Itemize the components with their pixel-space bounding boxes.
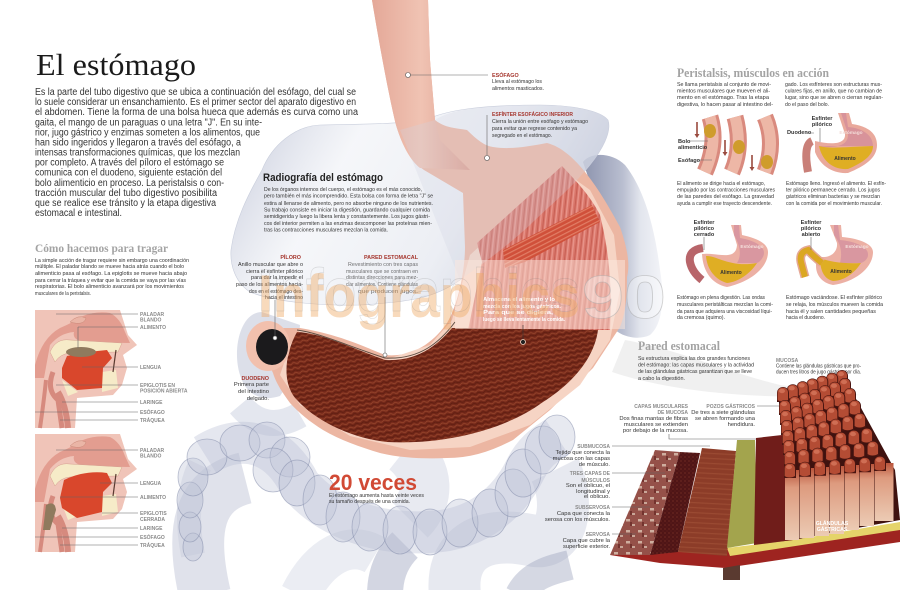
diagram: stomach open sphincter: Alimento (830, 269, 852, 275)
gland label: GLÁNDULAS (816, 520, 849, 527)
colon left tube (189, 465, 200, 555)
label: capas musculares de mucosa: CAPAS MUSCULARES (634, 404, 689, 410)
leader lines and labels: PALADAR (140, 448, 164, 454)
callout: esofago: alimentos masticados. (492, 86, 544, 92)
text: radiografia del estomago: semidigerida y luego la libera lenta y constantemente. Los jugos gástri- (264, 214, 430, 220)
callout: esofago: Lleva al estómago los (492, 79, 542, 85)
labels left of block: el oblicuo. (584, 494, 610, 500)
label: mucosa: Contiene las glándulas gástricas que pro- (776, 364, 861, 370)
intro text columns: do el paso del bolo. (785, 102, 829, 108)
captions row 2 (677, 295, 884, 321)
swallowing text block: musculares de la peristalsis. (35, 291, 91, 297)
callout: esfinter esofagico inferior: Cierra la unión entre esófago y estómago (492, 119, 588, 125)
illustration: liver overlay on stomach (400, 105, 609, 280)
captions row 1: Estómago lleno. Ingresó el alimento. El esfín- (786, 181, 886, 187)
muscle layers (468, 166, 611, 330)
intro text columns: culares fijas, en anillo, que no cambian de (785, 88, 882, 94)
watermark: Infographics (258, 257, 580, 324)
label: pozos gastricos: hendidura. (728, 422, 755, 428)
captions row 1 (677, 181, 886, 207)
intro text block: que se realice ese tránsito y la etapa digestiva (35, 198, 216, 209)
diagram: stomach closed sphincter: pilórico (694, 226, 715, 232)
diagram: stomach closed sphincter: Alimento (720, 270, 742, 276)
diagram: swallowing step 1 (35, 310, 188, 428)
serosa layer (610, 450, 680, 555)
callout: text in stomach band (483, 297, 566, 344)
diagram: stomach closed sphincter: Estómago (740, 244, 764, 250)
brown muscle layer (678, 448, 736, 556)
label: capas musculares de mucosa (619, 404, 820, 439)
watermark: Infographics (258, 263, 580, 330)
labels left of block: longitudinal y (576, 489, 610, 495)
callout: piloro: PÍLORO (280, 253, 301, 261)
callout: text in stomach band: luego se lleva lentamente la comida. (483, 317, 566, 323)
intro text columns: mento en el estómago. Tras la etapa (677, 95, 770, 101)
diagram: esophagus tubes (678, 117, 773, 172)
diagram: esophagus tubes: Esófago (678, 158, 701, 164)
captions row 2: hacia el duodeno. (786, 315, 825, 321)
callout: 20 veces (329, 470, 424, 505)
body text: a cabo la digestión. (638, 376, 685, 382)
body text: Su estructura explica las dos grandes funciones (638, 356, 750, 362)
body text: de las glándulas gástricas garantizan que se lleve (638, 369, 752, 375)
grey background swoosh (612, 340, 860, 397)
intro text block: el abdomen. Tiene la forma de una bolsa hueca que además es curva como una (35, 107, 358, 118)
label: capas musculares de mucosa: DE MUCOSA (657, 410, 688, 416)
panel: peristalsis (677, 66, 886, 321)
label: capas musculares de mucosa: por debajo de la mucosa. (623, 428, 688, 434)
label: capas musculares de mucosa: Dos finas mantas de fibras (619, 416, 688, 422)
callout: pared estomacal: musculares que se contraen en (346, 269, 418, 275)
labels left of block: serosa con los músculos. (545, 517, 610, 523)
heading: como hacemos para tragar: Cómo hacemos para tragar (35, 241, 169, 255)
captions row 2: hacia él y salen cantidades pequeñas (786, 309, 876, 315)
leader lines and labels: LENGUA (140, 365, 162, 371)
diagram: stomach open sphincter: Estómago (845, 244, 869, 250)
esophagus shading (372, 0, 470, 170)
leader lines and labels: ALIMENTO (140, 325, 166, 331)
captions row 1: ter pilórico permanece cerrado. Los jugos (786, 188, 880, 194)
callout: 20 veces: El estómago aumenta hasta veinte veces (329, 493, 424, 499)
food bolus (66, 347, 96, 357)
intro text block: intensas transformaciones químicas, que los mezclan (35, 148, 240, 158)
intro text block: lo suele considerar un ensanchamiento. Es el primer sector del aparato digestivo en (35, 97, 356, 108)
callout: duodeno: DUODENO (241, 376, 269, 382)
diagram: stomach closed sphincter: cerrado (694, 232, 715, 238)
callout: piloro: hacia el intestino (265, 295, 303, 301)
callout: 20 veces: 20 veces (329, 470, 417, 495)
diagram: stomach full (787, 113, 877, 173)
callout: text in stomach band: mezcla con los jugos gástricos. (483, 304, 562, 310)
diagram: stomach full: Duodeno (787, 130, 812, 136)
labels left of block: SERVOSA (586, 532, 610, 538)
intro text block: Es la parte del tubo digestivo que se ubica a continuación del esófago, del cual se (35, 87, 356, 98)
text: radiografia del estomago: pero también el más incomprendido. Esta bolsa con forma de letra "J" se (264, 194, 433, 200)
callout: piloro: dos en el estómago des- (249, 289, 303, 295)
callout: esfinter esofagico inferior (484, 110, 588, 160)
heading: Pared estomacal (638, 339, 720, 353)
diagram: esophagus tubes: alimenticio (678, 145, 708, 151)
text: radiografia del estomago (263, 172, 433, 234)
swallowing text block (35, 258, 189, 297)
captions row 1: gástricos eliminan bacterias y se mezclan (786, 194, 880, 200)
intro text block: rior, jugo gástrico y enzimas someten a los alimentos, que (35, 128, 260, 138)
leader lines and labels: ESÓFAGO (140, 408, 165, 416)
text: radiografia del estomago: Su trabajo consiste en iniciar la digestión, guardando cualquier comida (264, 208, 431, 214)
captions row 1: empujado por las contracciones musculares (677, 188, 775, 194)
yellow-green layer (727, 440, 757, 548)
labels left of block: superficie exterior. (563, 544, 610, 550)
intro text block: gaita, el mango de un paraguas o una letra "J". En su inte- (35, 118, 262, 128)
labels left of block: SUBSERVOSA (575, 505, 610, 511)
illustration: spleen (583, 155, 662, 338)
intro text columns: mientos musculares que mueven el ali- (677, 88, 770, 94)
intro text columns (677, 82, 883, 108)
callout: esfinter esofagico inferior: segregado en el estómago. (492, 133, 552, 139)
callout: pared estomacal: PARED ESTOMACAL (364, 255, 419, 261)
labels left of block: de músculo. (579, 462, 610, 468)
callout: esfinter esofagico inferior: para evitar que regrese contenido ya (492, 126, 578, 132)
body text: del estómago: las capas musculares y la actividad (638, 362, 754, 368)
leader lines and labels: ESÓFAGO (140, 533, 165, 541)
callout: esofago: ESÓFAGO (492, 71, 519, 79)
callout: pared estomacal: clar alimentos. Contiene glándulas (346, 282, 418, 288)
watermark band (455, 260, 625, 329)
text: radiografia del estomago: tras las contracciones musculares mezclan la comida. (264, 228, 388, 234)
heading: Peristalsis, músculos en acción (677, 66, 829, 80)
leader lines and labels: BLANDO (140, 318, 161, 324)
dark red layer (754, 435, 793, 545)
captions row 2: da para que adquiera una viscosidad líqui- (677, 309, 772, 315)
intro text block: han sido ingeridos y llegaron a través del esófago, a (35, 138, 241, 148)
red bottom base (610, 525, 900, 568)
pylorus opening (246, 321, 290, 371)
intro text block: comunica con el duodeno, siguiente estación del (35, 168, 222, 178)
leader lines and labels: PALADAR (140, 312, 164, 318)
stem below block (723, 565, 740, 580)
leader lines and labels: BLANDO (140, 454, 161, 460)
callout: piloro: paso de los alimentos hacia- (236, 282, 303, 288)
swallowing text block: para cerrar la tráquea y evitar que la comida se vaya por las vías (35, 278, 186, 284)
intro text block (35, 87, 358, 219)
gland label (816, 520, 849, 533)
label: pozos gastricos (691, 403, 790, 428)
callout: piloro: para dar la impedir el (251, 275, 303, 281)
intro text columns: Se llama peristalsis al conjunto de movi- (677, 82, 771, 88)
diagram: stomach full: Estómago (839, 130, 863, 136)
diagram: stomach open sphincter: pilórico (801, 226, 822, 232)
text: radiografia del estomago: cos del interior permiten a las enzimas descomponer las proteínas mien- (264, 221, 432, 227)
intro text columns: lugar, sino que se abren o cierran regulan- (785, 95, 883, 101)
label: mucosa (776, 358, 861, 376)
stomach outer wall (262, 0, 628, 458)
villi base (778, 375, 900, 540)
leader lines and labels (35, 448, 167, 549)
swallowing text block: respiratorias. El bolo alimenticio avanzará por los movimientos (35, 284, 184, 290)
tissue block illustration (610, 370, 900, 580)
callout: duodeno: delgado. (247, 396, 269, 402)
text: radiografia del estomago: Radiografía del estómago (263, 172, 383, 184)
swallowing text block: La simple acción de tragar requiere sin embargo una coordinación (35, 258, 189, 264)
callout: esofago (406, 71, 544, 92)
leader lines and labels: LENGUA (140, 481, 162, 487)
diagram: stomach full: pilórico (812, 122, 833, 128)
lesser curvature edge line (297, 322, 455, 358)
callout: pared estomacal (346, 255, 419, 357)
stomach interior rugae (286, 328, 598, 442)
callout: text in stomach band: Almacena el alimento y lo (483, 297, 555, 303)
captions row 2: Estómago en plena digestión. Las ondas (677, 295, 765, 301)
captions row 2: da cremosa (quimo). (677, 315, 725, 321)
gland bodies (785, 463, 894, 540)
leader lines and labels: TRÁQUEA (140, 542, 165, 549)
callout: pared estomacal: que producen jugos. (358, 289, 418, 295)
leader lines and labels: POSICIÓN ABIERTA (140, 386, 188, 394)
label: pozos gastricos: POZOS GÁSTRICOS (706, 403, 756, 410)
intro text block: tracción muscular del tubo digestivo posibilita (35, 188, 217, 199)
villi grid (777, 370, 886, 478)
label: pozos gastricos: se abren formando una (695, 416, 756, 422)
callout: piloro: Anillo muscular que abre o (238, 262, 303, 268)
yellow submucosa strip (727, 522, 900, 556)
intro text block: estomacal e intestinal. (35, 208, 122, 219)
callout: duodeno (234, 376, 269, 402)
callout: text in stomach band: Para que se digiera, (483, 310, 554, 316)
labels left of block: Son el oblicuo, el (566, 483, 610, 489)
leader lines and labels: EPIGLOTIS (140, 511, 167, 517)
leader lines and labels: ALIMENTO (140, 495, 166, 501)
captions row 1: ayuda a cumplir ese trayecto descendente. (677, 201, 772, 207)
tongue (62, 350, 112, 390)
intro text columns: digestiva, lo hacen pasar al intestino del- (677, 102, 773, 108)
illustration: duodenum translucent shell (237, 312, 300, 398)
leader lines and labels: EPIGLOTIS EN (140, 383, 175, 389)
text: radiografia del estomago: De los órganos internos del cuerpo, el estómago es el más conocido, (264, 187, 422, 193)
diagram: stomach closed sphincter: Esfínter (694, 220, 715, 226)
callout: piloro: cierra el esfínter pilórico (246, 269, 303, 275)
illustration: liver (231, 105, 609, 305)
food bolus in esophagus (43, 503, 56, 530)
tongue raised (60, 472, 112, 518)
illustration: stomach and esophagus (246, 0, 628, 458)
captions row 1: con la comida por el movimiento muscular. (786, 201, 882, 207)
callout: piloro (236, 253, 303, 340)
colon tube (205, 437, 557, 532)
leader lines and labels (35, 312, 188, 424)
swallowing text block: alimenticio pasa al esófago. La epiglotis se mueve hacia abajo (35, 271, 187, 277)
captions row 2: musculares peristálticas mezclan la comi- (677, 302, 773, 308)
labels left of block: Capa que cubre la (563, 538, 611, 544)
labels left of block (545, 444, 710, 550)
panel: pared estomacal (545, 339, 900, 580)
body text (638, 356, 754, 382)
captions row 2: Estómago vaciándose. El esfínter pilórico (786, 295, 882, 301)
watermark: 90 (582, 264, 666, 331)
intro text columns: gado. Los esfínteres son estructuras mus- (785, 82, 882, 88)
leader lines and labels: CERRADA (140, 517, 165, 523)
diagram: stomach full: Alimento (834, 156, 856, 162)
leader lines and labels: LARINGE (140, 400, 163, 406)
illustration: translucent intestines (177, 405, 575, 590)
callout: 20 veces: su tamaño después de una comida. (329, 499, 410, 505)
intro text block: por completo. A través del píloro el estómago se (35, 158, 224, 168)
labels left of block: Capa que conecta la (557, 511, 611, 517)
diagram: stomach open sphincter: abierto (802, 232, 821, 238)
label: mucosa: MUCOSA (776, 358, 799, 364)
leader lines and labels: LARINGE (140, 526, 163, 532)
diagram: stomach full: Esfínter (812, 116, 833, 122)
text: radiografia del estomago: estira al llenarse de alimento, pero no absorbe ninguno de los nutrientes. (264, 201, 433, 207)
labels left of block: SUBMUCOSA (577, 444, 610, 450)
diagram: stomach open sphincter: Esfínter (801, 220, 822, 226)
labels left of block: TRES CAPAS DE (570, 471, 611, 477)
callout: duodeno: Primera parte (234, 382, 269, 388)
pale rim of cut wall (280, 170, 620, 450)
diagram: esophagus tubes: Bolo (678, 139, 691, 145)
swallowing text block: múltiple. El paladar blando se mueve hacia atrás cuando el bolo (35, 264, 184, 270)
diagram: stomach open sphincter (801, 220, 873, 285)
label: pozos gastricos: De tres a siete glándulas (691, 410, 755, 416)
label: mucosa: ducen tres litros de jugo gástrico por día. (776, 370, 861, 376)
captions row 2: se relaja, los músculos mueven la comida (786, 302, 884, 308)
oblique muscle band (503, 205, 600, 268)
captions row 1: El alimento se dirige hacia el estómago, (677, 181, 765, 187)
leader lines and labels: TRÁQUEA (140, 417, 165, 424)
labels left of block: MÚSCULOS (581, 477, 611, 484)
intro text block: bolo alimenticio en proceso. La peristalsis o con- (35, 178, 224, 189)
captions row 1: de las paredes del esófago. La gravedad (677, 194, 774, 200)
gland label: GÁSTRICAS (817, 526, 848, 533)
label: capas musculares de mucosa: musculares se extienden (624, 422, 688, 428)
title: El estómago (36, 47, 196, 82)
callout: duodeno: del intestino (238, 389, 269, 395)
callout: pared estomacal: Revestimiento con tres capas (348, 262, 418, 268)
diagram: swallowing step 2 (35, 434, 167, 552)
labels left of block: mucosa con las capas (553, 456, 610, 462)
callout: esfinter esofagico inferior: ESFÍNTER ESOFÁGICO INFERIOR (492, 110, 573, 118)
speckled dark layer (650, 452, 700, 555)
labels left of block: Tejido que conecta la (556, 450, 611, 456)
diagram: stomach closed sphincter (690, 220, 768, 287)
callout: pared estomacal: distintas direcciones para mez- (346, 275, 418, 281)
colon segments (177, 415, 575, 561)
